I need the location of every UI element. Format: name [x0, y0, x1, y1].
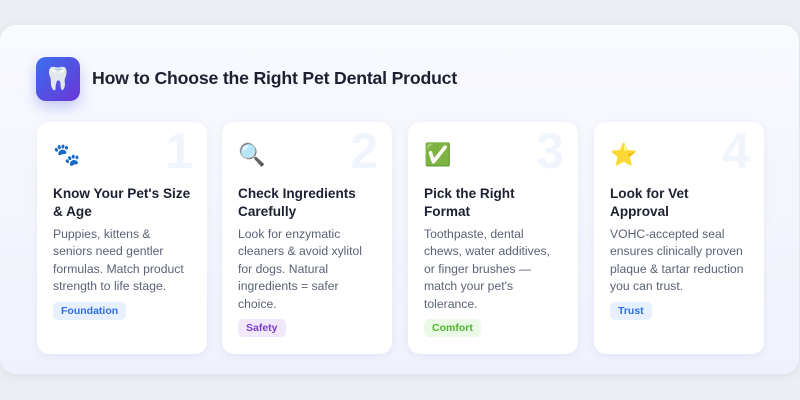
icon: tooth: 🦷: [44, 66, 72, 91]
heading: [238, 186, 356, 219]
tag: [424, 319, 481, 337]
heading: Approval: [610, 204, 669, 219]
heading: Format: [424, 204, 470, 219]
tag: [238, 319, 286, 337]
icon: magnifier: 🔍: [238, 142, 265, 167]
body: Look for enzymatic cleaners & avoid xylitol for dogs. Natural ingredients = safer choice.: [238, 227, 362, 311]
number 1: 1: [165, 123, 193, 179]
tag: Foundation: [61, 305, 118, 317]
body: VOHC-accepted seal ensures clinically proven plaque & tartar reduction you can trust.: [610, 227, 743, 293]
body: Toothpaste, dental chews, water additives, or finger brushes — match your pet's tolerance.: [424, 227, 550, 311]
heading: Check Ingredients: [238, 186, 356, 201]
card 3: [408, 122, 578, 354]
body: Puppies, kittens & seniors need gentler formulas. Match product strength to life stage.: [53, 227, 184, 293]
tag: [610, 302, 652, 320]
card 2: [222, 122, 392, 354]
heading: Pick the Right: [424, 186, 515, 201]
heading: [610, 186, 689, 219]
heading: [424, 186, 515, 219]
card 1: [37, 122, 207, 354]
title: How to Choose the Right Pet Dental Product: [92, 68, 457, 88]
icon: check: ✅: [424, 142, 451, 167]
number 2: 2: [350, 123, 378, 179]
card 4: [594, 122, 764, 354]
heading: [53, 186, 190, 219]
icon: paws: 🐾: [53, 142, 80, 167]
tag: [53, 302, 126, 320]
heading: Know Your Pet's Size: [53, 186, 190, 201]
tag: Trust: [618, 305, 644, 317]
tag: Comfort: [432, 322, 473, 334]
tag: Safety: [246, 322, 278, 334]
heading: Look for Vet: [610, 186, 689, 201]
number 4: 4: [722, 123, 750, 179]
heading: & Age: [53, 204, 92, 219]
number 3: 3: [536, 123, 564, 179]
icon: tooth: [36, 57, 80, 101]
icon: star: ⭐: [610, 142, 637, 167]
heading: Carefully: [238, 204, 296, 219]
